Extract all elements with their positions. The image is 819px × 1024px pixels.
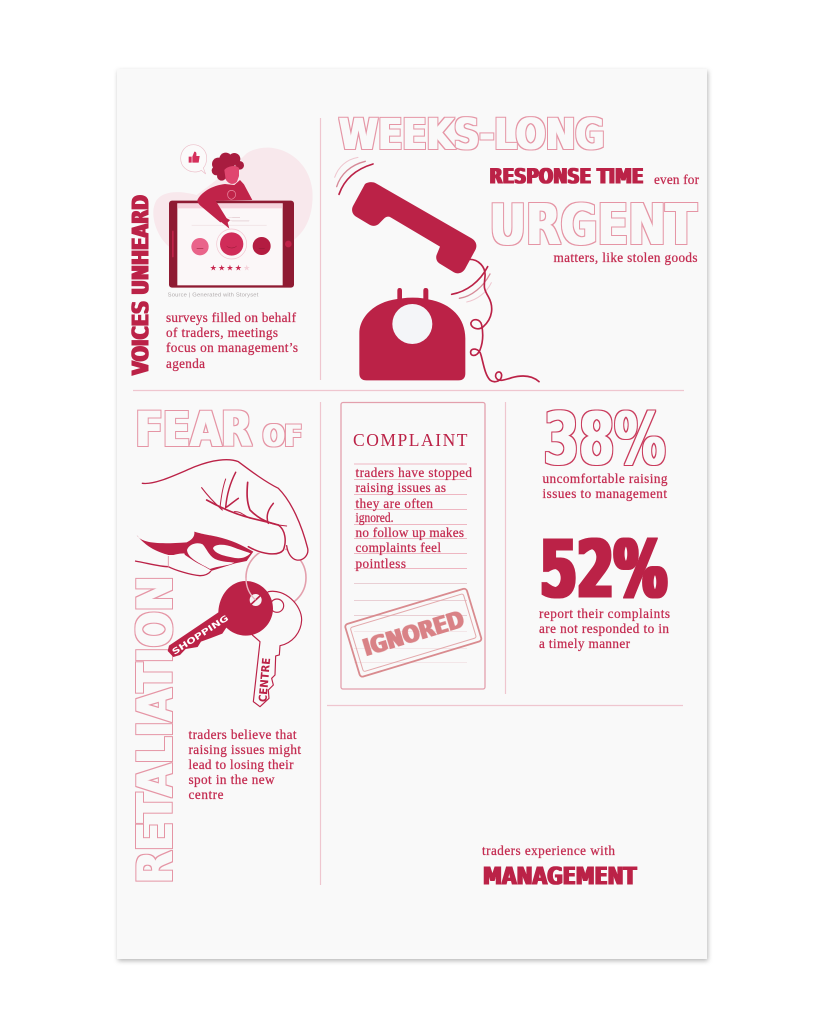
dividers — [133, 118, 684, 885]
body text: focus on management’s — [166, 340, 298, 355]
panel: fear of retaliation — [127, 402, 308, 884]
form rules — [354, 464, 467, 662]
star rating: ★ — [210, 264, 217, 273]
panel: voices unheard — [126, 145, 313, 375]
star rating: ★ — [226, 264, 234, 273]
body text: surveys filled on behalf — [166, 310, 297, 325]
body text: traders believe that — [188, 727, 297, 742]
footer heading: MANAGEMENT — [483, 862, 636, 890]
necklace heart — [228, 190, 236, 199]
shaded gap between fingers — [137, 532, 253, 571]
text: even for: even for — [654, 172, 700, 187]
key: centre — [252, 591, 302, 707]
cord — [469, 259, 539, 382]
telephone base — [359, 288, 465, 380]
hair — [212, 153, 244, 181]
pointing finger — [220, 217, 230, 229]
body text: of traders, meetings — [166, 325, 278, 340]
heading: weeks-long: WEEKS-LONG — [339, 110, 604, 160]
stat caption: are not responded to in — [539, 621, 669, 636]
star rating: ★ — [218, 264, 225, 273]
complaint text: raising issues as — [356, 480, 446, 495]
footer intro text: traders experience with — [482, 843, 615, 858]
body text: spot in the new — [188, 772, 275, 787]
star rating — [210, 264, 250, 273]
motion lines — [232, 218, 249, 221]
middle finger — [213, 545, 250, 558]
stat caption: a timely manner — [539, 636, 631, 651]
complaint text: ignored. — [356, 510, 394, 525]
stamp: ignored: IGNORED — [360, 605, 467, 662]
background blob — [153, 148, 313, 247]
key ring — [246, 548, 306, 608]
heading: urgent: URGENT — [490, 193, 696, 258]
stat: 52 percent: 52% — [540, 524, 667, 616]
vertical heading: VOICES UNHEARD — [126, 195, 154, 375]
wrist line — [135, 561, 211, 576]
poster sheet — [117, 69, 707, 959]
body text: lead to losing their — [188, 757, 294, 772]
body text — [166, 310, 298, 371]
stat caption: issues to management — [542, 486, 667, 501]
icon: ringing telephone — [335, 157, 539, 382]
complaint text: pointless — [356, 556, 406, 571]
body text: raising issues might — [188, 742, 301, 757]
complaint text: complaints feel — [356, 540, 441, 555]
stat caption: report their complaints — [539, 606, 670, 621]
hand silhouette — [137, 460, 308, 576]
panel: complaint form — [341, 402, 485, 689]
hand — [135, 460, 308, 576]
hand outline — [142, 460, 308, 560]
key: shopping — [168, 581, 273, 657]
panel: response time — [335, 110, 700, 382]
stat caption: uncomfortable raising — [542, 471, 668, 486]
complaint text: no follow up makes — [356, 525, 464, 540]
heading: response time: RESPONSE TIME — [490, 164, 644, 190]
stat caption — [542, 471, 668, 501]
body text: agenda — [166, 356, 205, 371]
ring through key hole — [246, 578, 256, 600]
finger creases — [202, 472, 287, 554]
key: centre: CENTRE — [256, 657, 273, 703]
heading: fear: FEAR — [136, 402, 252, 458]
stat caption — [539, 606, 670, 651]
complaint text: they are often — [356, 496, 433, 511]
stamp: ignored — [345, 588, 482, 677]
dial — [392, 304, 432, 344]
little finger — [168, 553, 211, 575]
illustration: woman and speech bubble — [181, 145, 252, 229]
star rating: ★ — [235, 264, 242, 273]
index finger — [187, 543, 234, 569]
illustration: tablet rating — [153, 148, 313, 299]
complaint text — [356, 465, 472, 571]
form heading: COMPLAINT — [353, 430, 468, 450]
text: matters: matters, like stolen goods — [554, 250, 698, 265]
illustration: hand holding keys — [135, 460, 308, 707]
key: shopping: SHOPPING — [170, 613, 230, 657]
vertical heading: retaliation: RETALIATION — [127, 576, 184, 884]
footer title — [482, 843, 636, 890]
stat: 38 percent: 38% — [544, 397, 666, 481]
heading: of: OF — [263, 419, 302, 453]
rating faces — [191, 229, 271, 259]
handset — [352, 182, 476, 273]
panel: statistics — [539, 397, 670, 651]
body text: centre — [188, 787, 224, 802]
complaint text: traders have stopped — [356, 465, 472, 480]
vibration arcs — [335, 157, 491, 302]
tablet — [169, 201, 294, 288]
speech bubble with thumb — [181, 145, 207, 174]
form border — [341, 402, 485, 689]
face — [224, 166, 239, 184]
star rating: ★ — [243, 264, 250, 273]
body text — [188, 727, 301, 802]
source credit: Source | Generated with Storyset — [168, 293, 259, 299]
body and arm — [197, 180, 252, 222]
